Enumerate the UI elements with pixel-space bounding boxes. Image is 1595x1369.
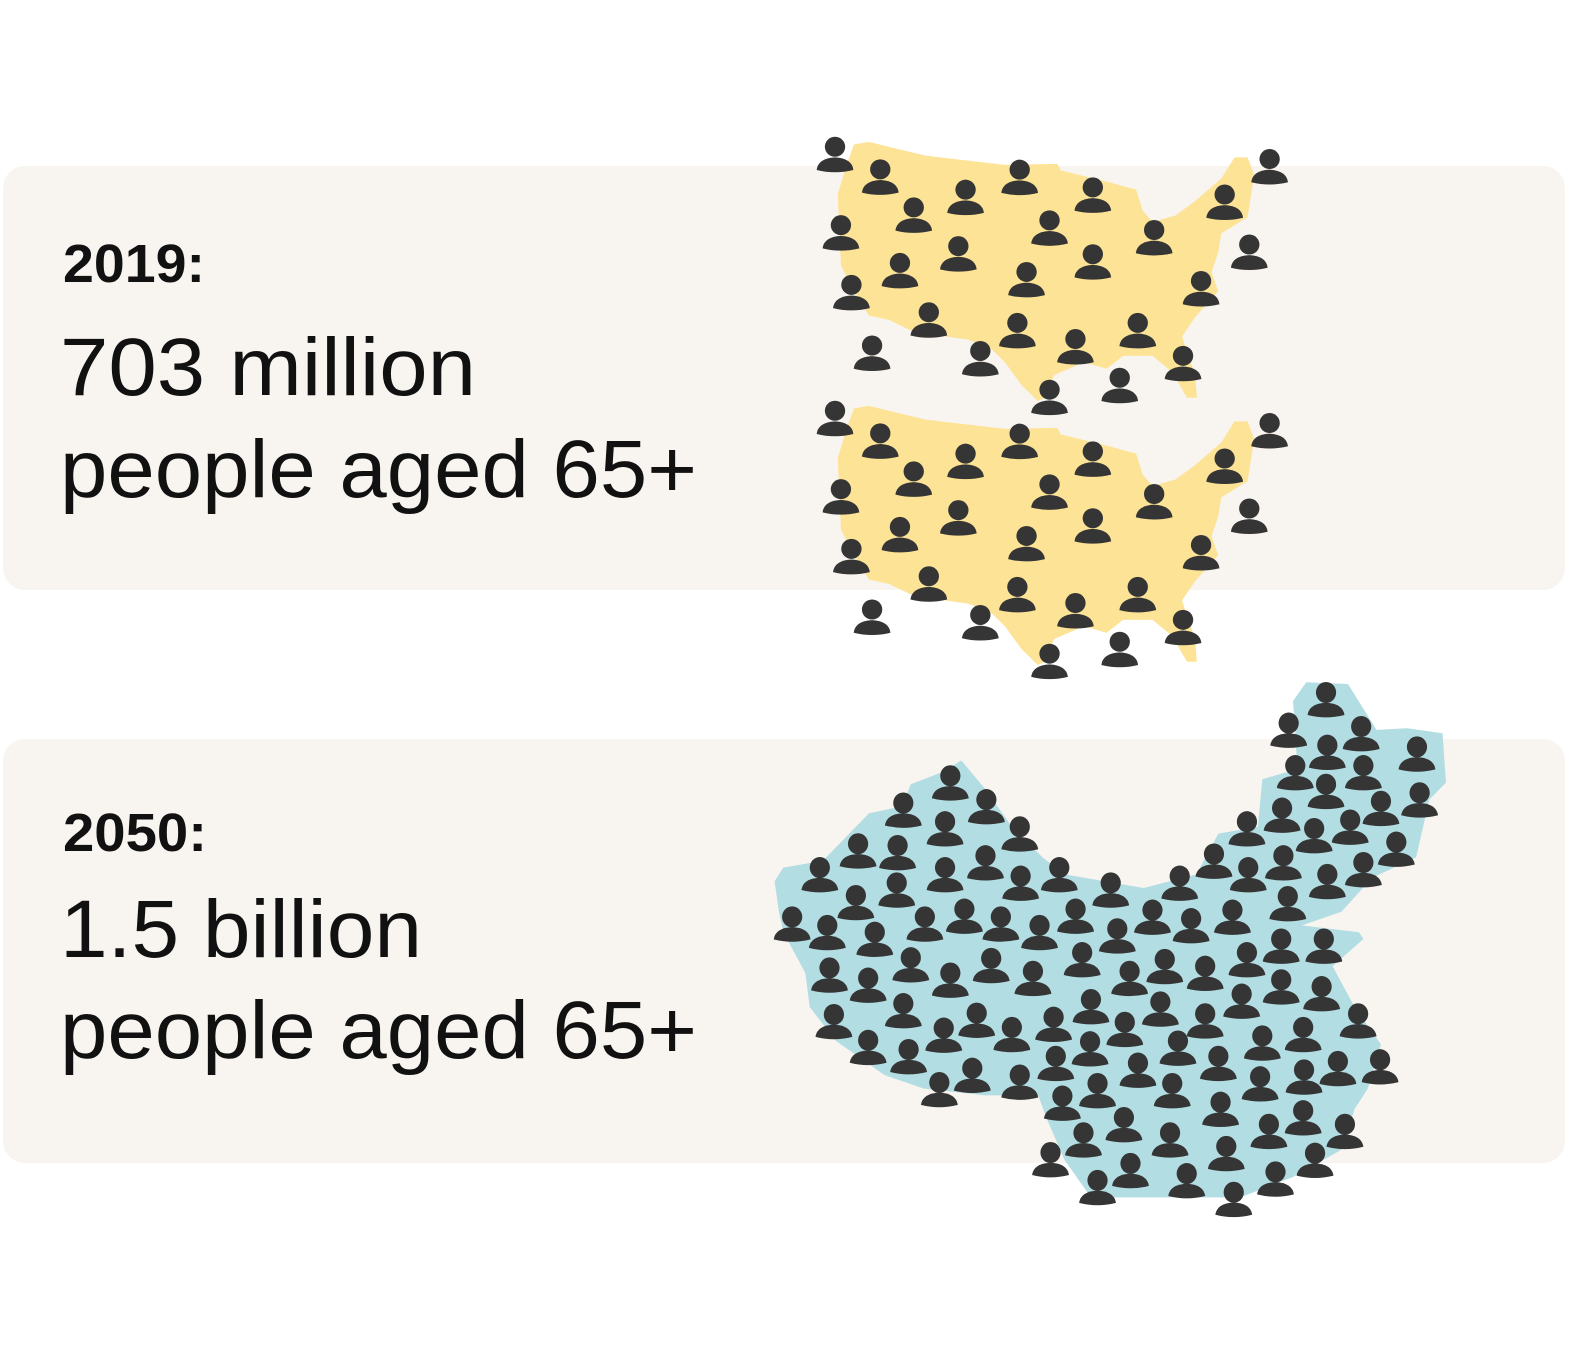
- map: China: [774, 682, 1446, 1217]
- heading: 2019: 2019:: [63, 234, 205, 294]
- text: people aged 65+ (2019): people aged 65+: [60, 424, 697, 515]
- map: USA top: [817, 137, 1288, 415]
- text: 703 million: 703 million: [60, 322, 476, 413]
- panel: 2019: [3, 166, 1565, 590]
- map: USA bottom: [817, 401, 1288, 679]
- text: 1.5 billion: 1.5 billion: [60, 884, 422, 975]
- panel: 2050: [3, 739, 1565, 1163]
- text: people aged 65+ (2050): people aged 65+: [60, 985, 697, 1076]
- heading: 2050: 2050:: [63, 803, 207, 863]
